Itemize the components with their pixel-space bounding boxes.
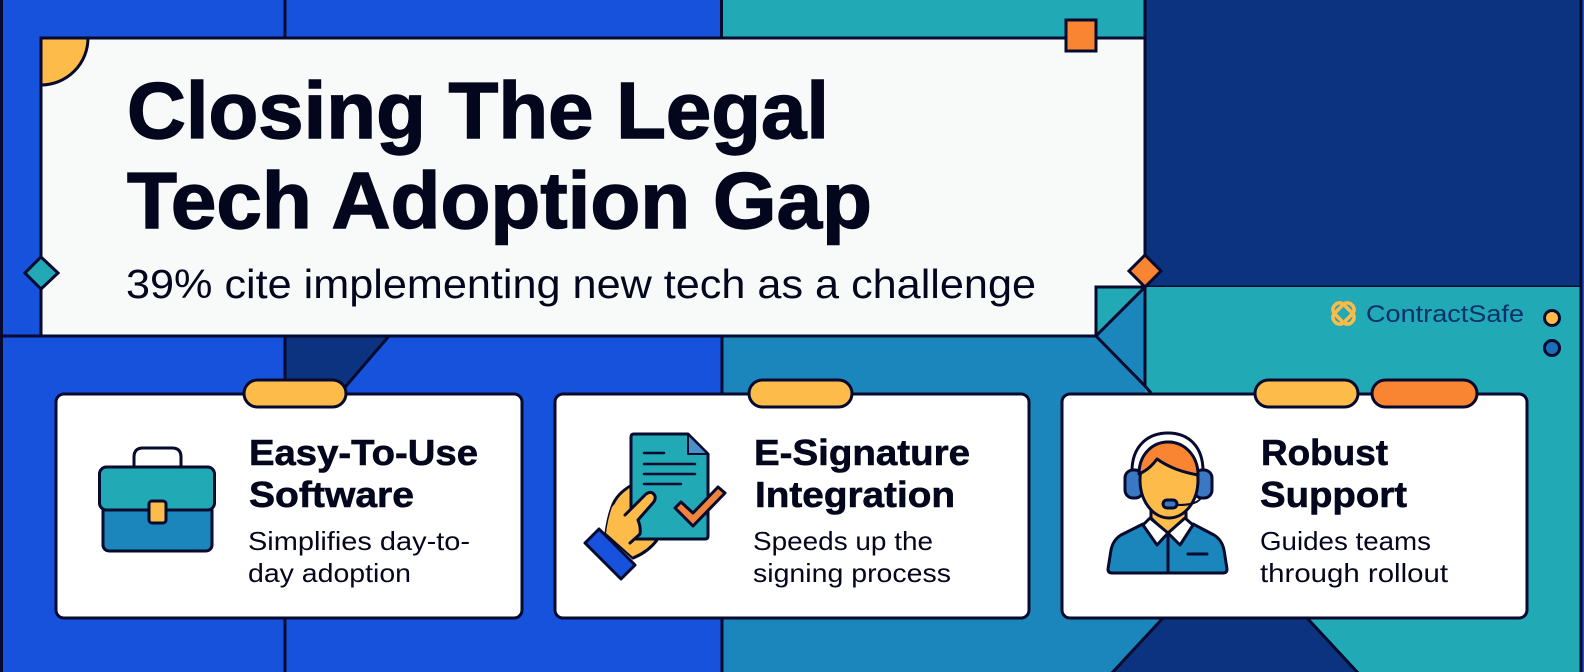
title: Tech Adoption Gap [127, 156, 872, 245]
description: Simplifies day-to- [248, 526, 470, 556]
title [127, 66, 872, 245]
decoration: blue dot [1544, 340, 1560, 356]
heading: Support [1260, 474, 1407, 515]
heading [1260, 432, 1407, 515]
icon: support agent [1108, 433, 1227, 573]
title: Closing The Legal [127, 66, 829, 155]
description: Guides teams [1260, 526, 1431, 556]
icon: hand holding signed document [585, 434, 725, 579]
description [753, 526, 951, 588]
tab: orange [1372, 380, 1477, 407]
decoration: teal diamond [25, 257, 58, 289]
panel: easy-to-use software card [56, 380, 522, 618]
notch triangles [1096, 287, 1151, 393]
description: Speeds up the [753, 526, 933, 556]
heading [754, 432, 970, 515]
heading: Robust [1261, 432, 1388, 473]
heading: Integration [755, 474, 955, 515]
heading [249, 432, 478, 515]
tab [244, 380, 346, 407]
heading: Easy-To-Use [249, 432, 478, 473]
subtitle: 39% cite implementing new tech as a challenge [126, 261, 1036, 307]
decoration: gold quarter circle [41, 38, 88, 85]
panel: robust support card [1062, 380, 1527, 618]
decoration: orange diamond [1129, 255, 1161, 287]
panel: e-signature integration card [555, 380, 1029, 618]
heading: Software [249, 474, 414, 515]
description [1260, 526, 1449, 588]
icon: logo mark [1330, 300, 1357, 327]
decoration: orange square [1066, 20, 1096, 51]
panel: title [25, 20, 1161, 393]
tab [749, 380, 852, 407]
icon: briefcase [100, 448, 214, 551]
description: signing process [753, 558, 951, 588]
description [248, 526, 470, 588]
description: through rollout [1260, 558, 1449, 588]
description: day adoption [248, 558, 411, 588]
heading: E-Signature [754, 432, 970, 473]
tab: gold [1255, 380, 1358, 407]
logo: ContractSafe: ContractSafe [1366, 301, 1524, 328]
decoration: gold dot [1544, 310, 1560, 326]
